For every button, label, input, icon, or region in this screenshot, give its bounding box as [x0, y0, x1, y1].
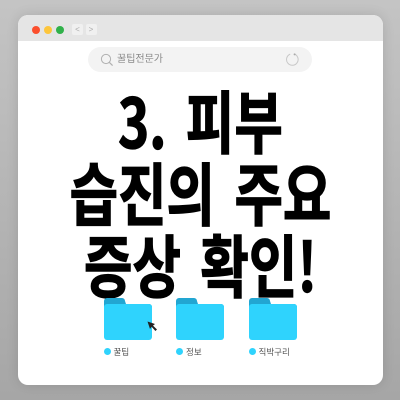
icon: reload [286, 53, 299, 66]
title bar [18, 15, 382, 41]
icon: forward button [86, 24, 96, 34]
icon: folder [176, 298, 224, 340]
title [69, 69, 331, 312]
icon: maximise button [56, 26, 64, 34]
icon: mouse cursor [148, 322, 157, 331]
legend dot [176, 348, 183, 355]
icon: folder [249, 298, 297, 340]
icon: forward button: > [89, 24, 93, 34]
title line 1: 3. 피부 [118, 69, 282, 168]
title line 2: 습진의 주요 [69, 141, 331, 240]
label: 꿀팁 [114, 346, 129, 356]
icon: back button: < [75, 24, 80, 34]
search bar [88, 47, 312, 72]
title line 3: 증상 확인! [84, 213, 316, 312]
icon: folder [104, 298, 152, 340]
icon: close button [32, 26, 40, 34]
icon: minimise button [44, 26, 52, 34]
legend dot [248, 348, 256, 355]
label: 정보 [186, 346, 202, 356]
folder: 정보 [176, 298, 224, 356]
icon: magnifier [101, 54, 113, 66]
folder: 직박구리 [249, 298, 297, 356]
search text: 꿀팁전문가 [117, 54, 163, 65]
label: 직박구리 [258, 346, 290, 356]
icon: back button [72, 24, 83, 34]
folder: 꿀팁 [104, 298, 152, 356]
legend dot [104, 348, 110, 355]
